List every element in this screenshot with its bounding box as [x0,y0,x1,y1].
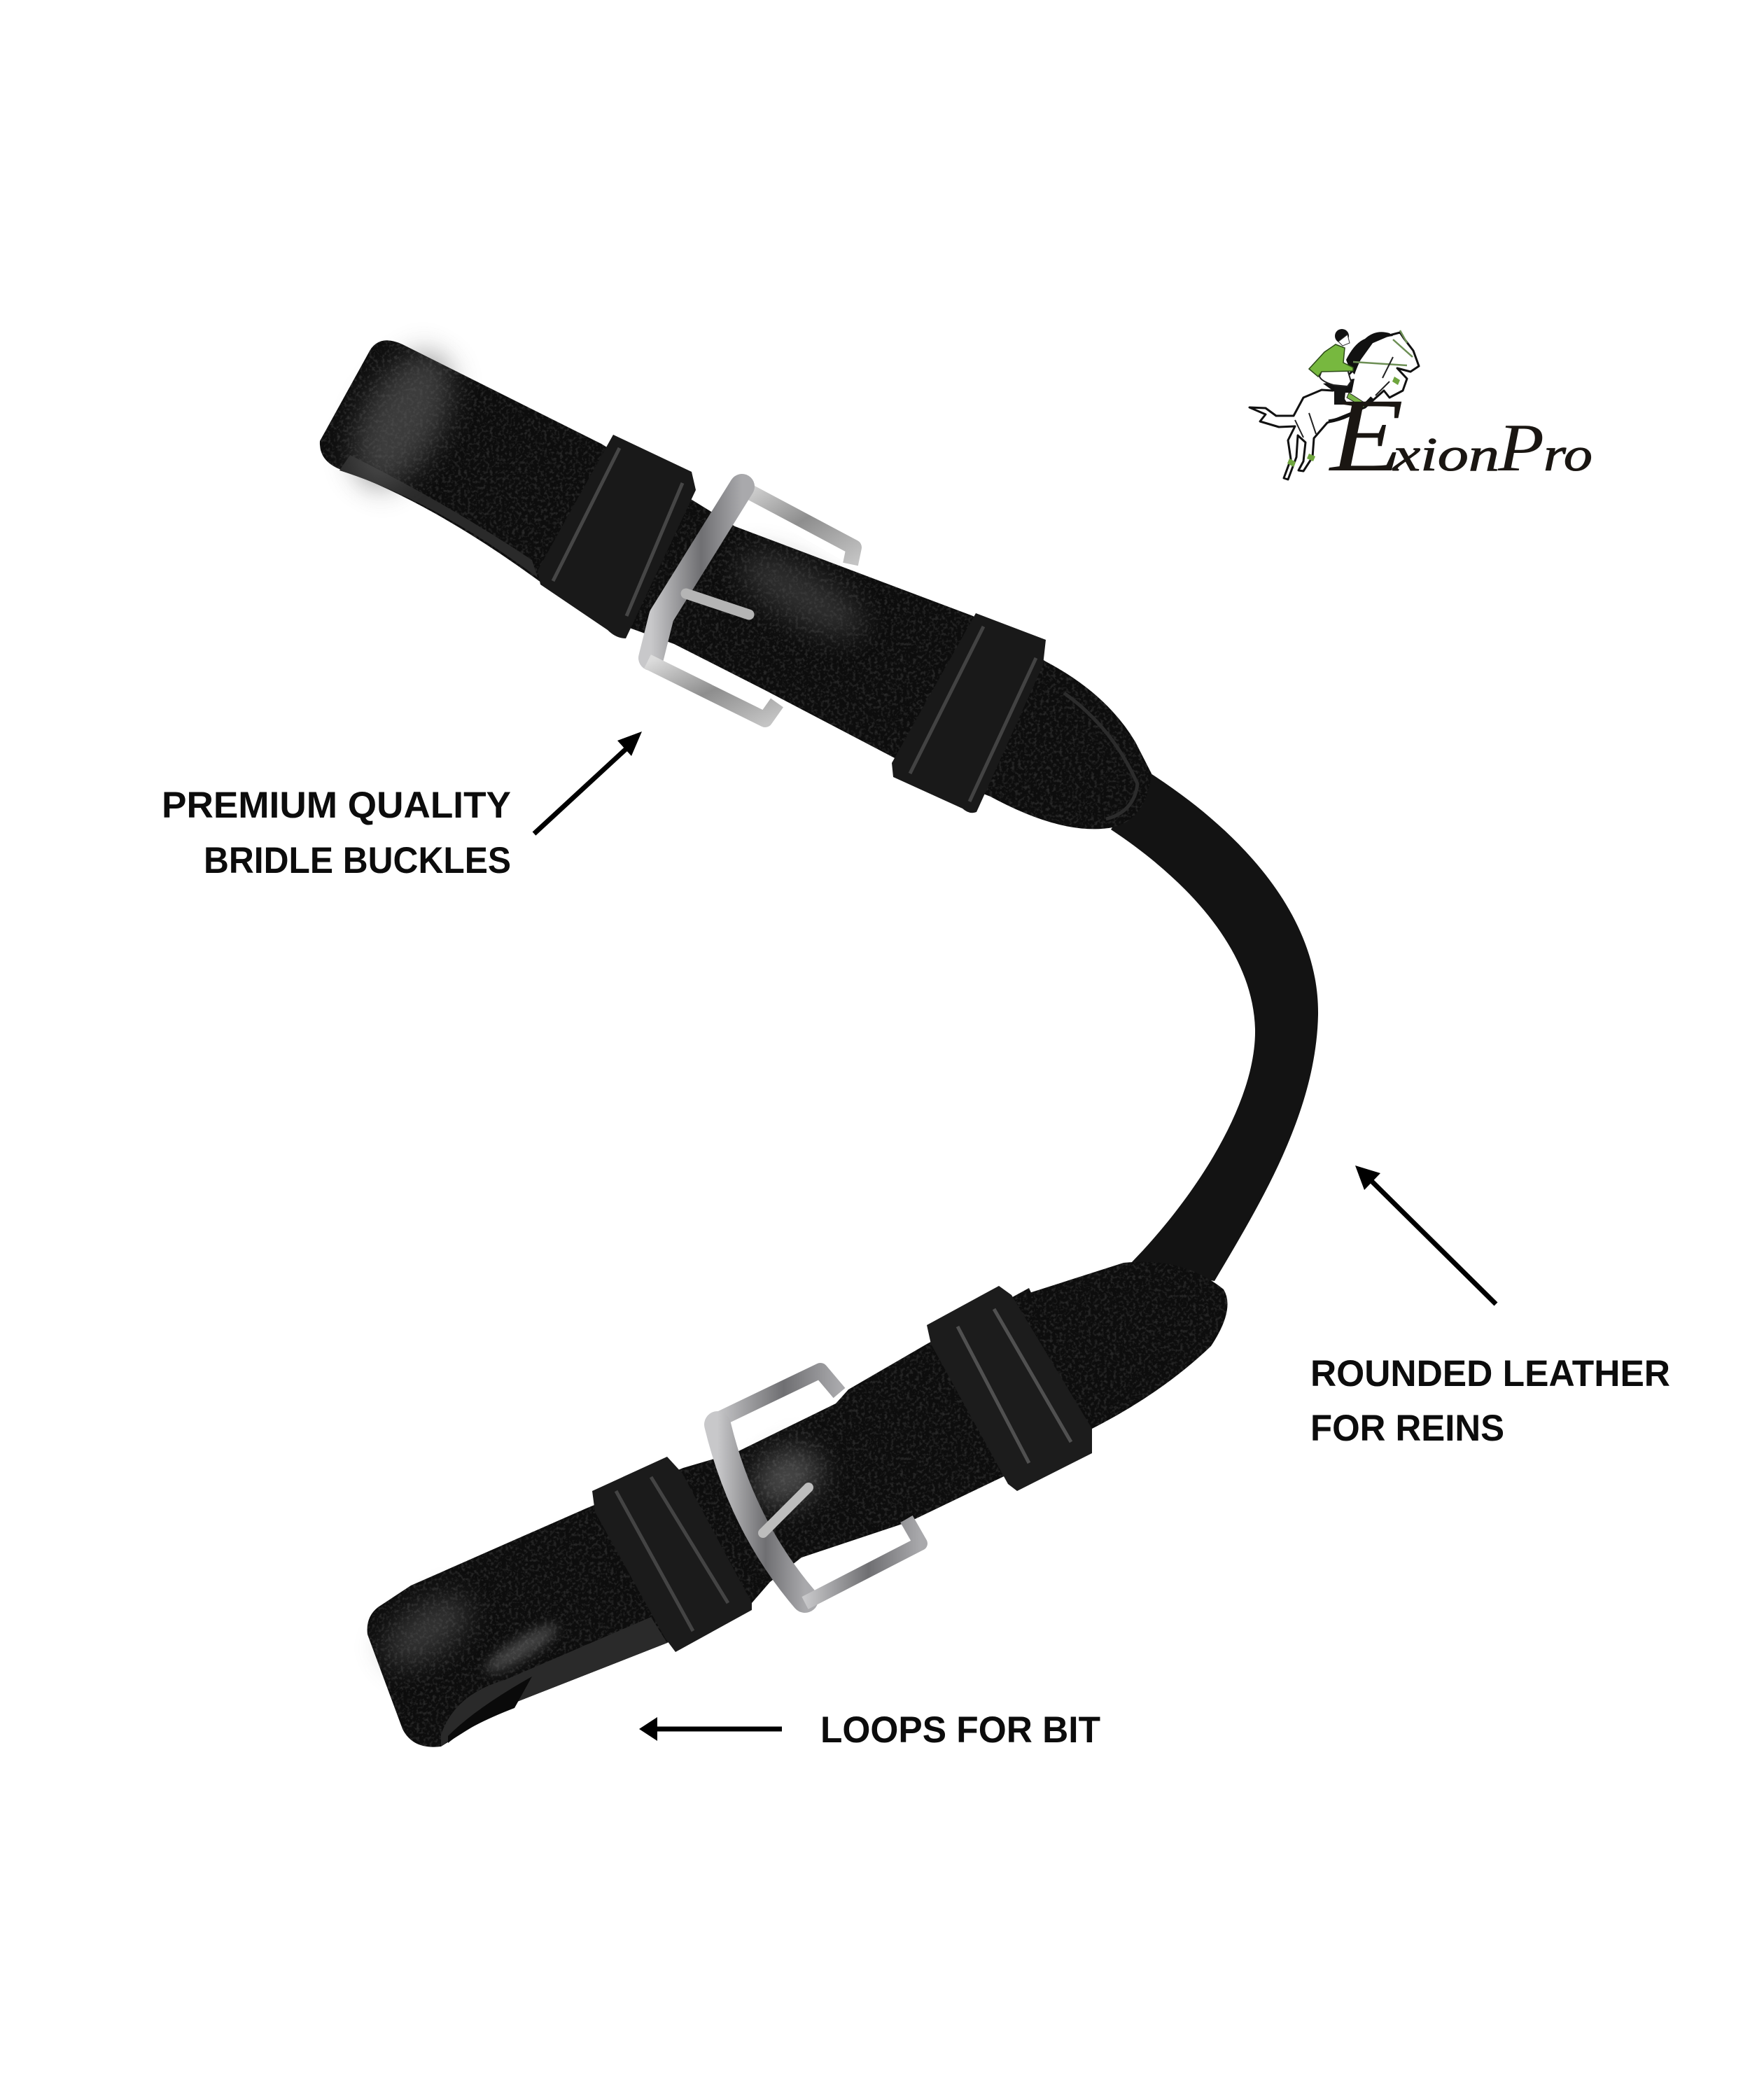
bottom rein end tip [1018,1262,1228,1429]
label: rounded leather for reins: ROUNDED LEATHER [1310,1353,1670,1394]
buckle bottom [715,1371,920,1603]
wordmark [1329,377,1592,493]
icon: horse and rider [1250,329,1419,479]
wordmark: ro [1544,428,1592,481]
label: loops for bit: LOOPS FOR BIT [820,1709,1100,1751]
label: rounded leather for reins: FOR REINS [1310,1408,1504,1449]
top strap with loop [320,337,1152,829]
label: premium quality bridle buckles: PREMIUM QUALITY [162,785,511,826]
wordmark: E [1329,377,1404,493]
keeper 1 [538,435,696,638]
wordmark: xion [1392,428,1499,481]
label: premium quality bridle buckles [162,785,511,881]
arrow: to buckle [534,732,642,834]
rounded leather rein [1111,774,1318,1281]
keeper 3 [927,1286,1092,1491]
wordmark: P [1497,410,1544,486]
arrow: to rounded rein [1355,1166,1496,1304]
keeper 4 [592,1457,752,1652]
arrow: to loop [639,1717,782,1741]
label: premium quality bridle buckles: BRIDLE BUCKLES [204,840,511,881]
keeper 2 [892,613,1046,813]
bottom strap with loop [368,1288,1092,1747]
product: leather strap [320,337,1318,1747]
label: rounded leather for reins [1310,1353,1670,1449]
logo: ExionPro [1250,329,1592,493]
buckle top [648,486,854,720]
